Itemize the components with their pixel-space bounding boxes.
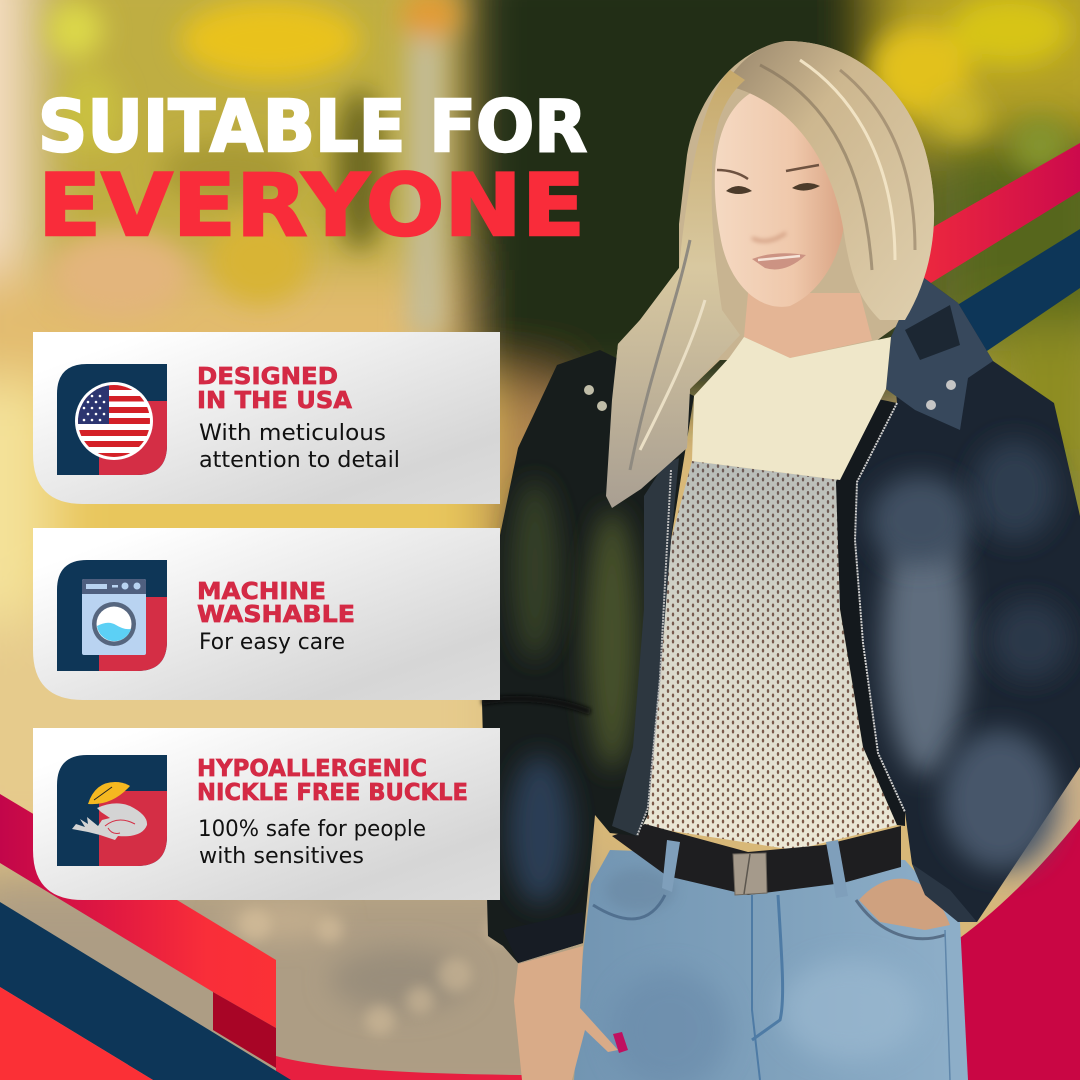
- heading: IN THE USA: [197, 386, 353, 414]
- panel: designed in the USA: [33, 332, 500, 504]
- body text: For easy care: [199, 630, 345, 655]
- neck: [744, 293, 872, 358]
- icon: washing machine: [57, 560, 167, 671]
- knit collar: [692, 337, 891, 480]
- hair strands: [630, 60, 915, 470]
- decorative curve: bottom right crimson: [950, 819, 1080, 1080]
- heading: DESIGNED: [197, 362, 338, 390]
- body text: [199, 421, 400, 473]
- panel: hypoallergenic: [33, 728, 500, 900]
- right jacket inner band: [836, 396, 905, 826]
- hand in pocket: [859, 879, 950, 930]
- heading: WASHABLE: [197, 600, 355, 628]
- title: SUITABLE FOR: [38, 85, 587, 168]
- heading: [197, 577, 355, 628]
- heading: MACHINE: [197, 577, 326, 605]
- woman photo illustration: [482, 41, 1080, 1080]
- heading: NICKLE FREE BUCKLE: [197, 778, 468, 806]
- title: EVERYONE: [38, 156, 585, 256]
- belly mesh sweater: [640, 461, 897, 850]
- body text: With meticulous: [199, 421, 386, 446]
- title: [38, 85, 587, 256]
- belt loops: [662, 840, 848, 898]
- body text: [198, 817, 426, 869]
- face: [715, 88, 846, 307]
- decorative ribbons: bottom left: [0, 794, 530, 1080]
- belt buckle: [733, 853, 767, 895]
- eyes brows nose mouth: [717, 165, 820, 269]
- belt: [612, 824, 901, 895]
- decorative ribbons: top right: [900, 143, 1080, 376]
- jacket right side: [836, 275, 1080, 922]
- heading: HYPOALLERGENIC: [197, 754, 427, 782]
- jacket left side: [482, 350, 694, 963]
- body text: 100% safe for people: [198, 817, 426, 842]
- back hair: [606, 41, 934, 508]
- icon: leaf and hand: [57, 755, 167, 866]
- front hair: [725, 41, 934, 320]
- left lapel: [612, 458, 679, 836]
- panel: machine washable: [33, 528, 500, 700]
- body text: with sensitives: [199, 844, 364, 869]
- heading: [197, 754, 468, 806]
- right hand: [514, 946, 628, 1080]
- icon: US flag: [57, 364, 167, 475]
- body text: attention to detail: [199, 448, 400, 473]
- heading: [197, 362, 353, 414]
- jeans: [574, 850, 968, 1080]
- jeans shading: [593, 868, 950, 1080]
